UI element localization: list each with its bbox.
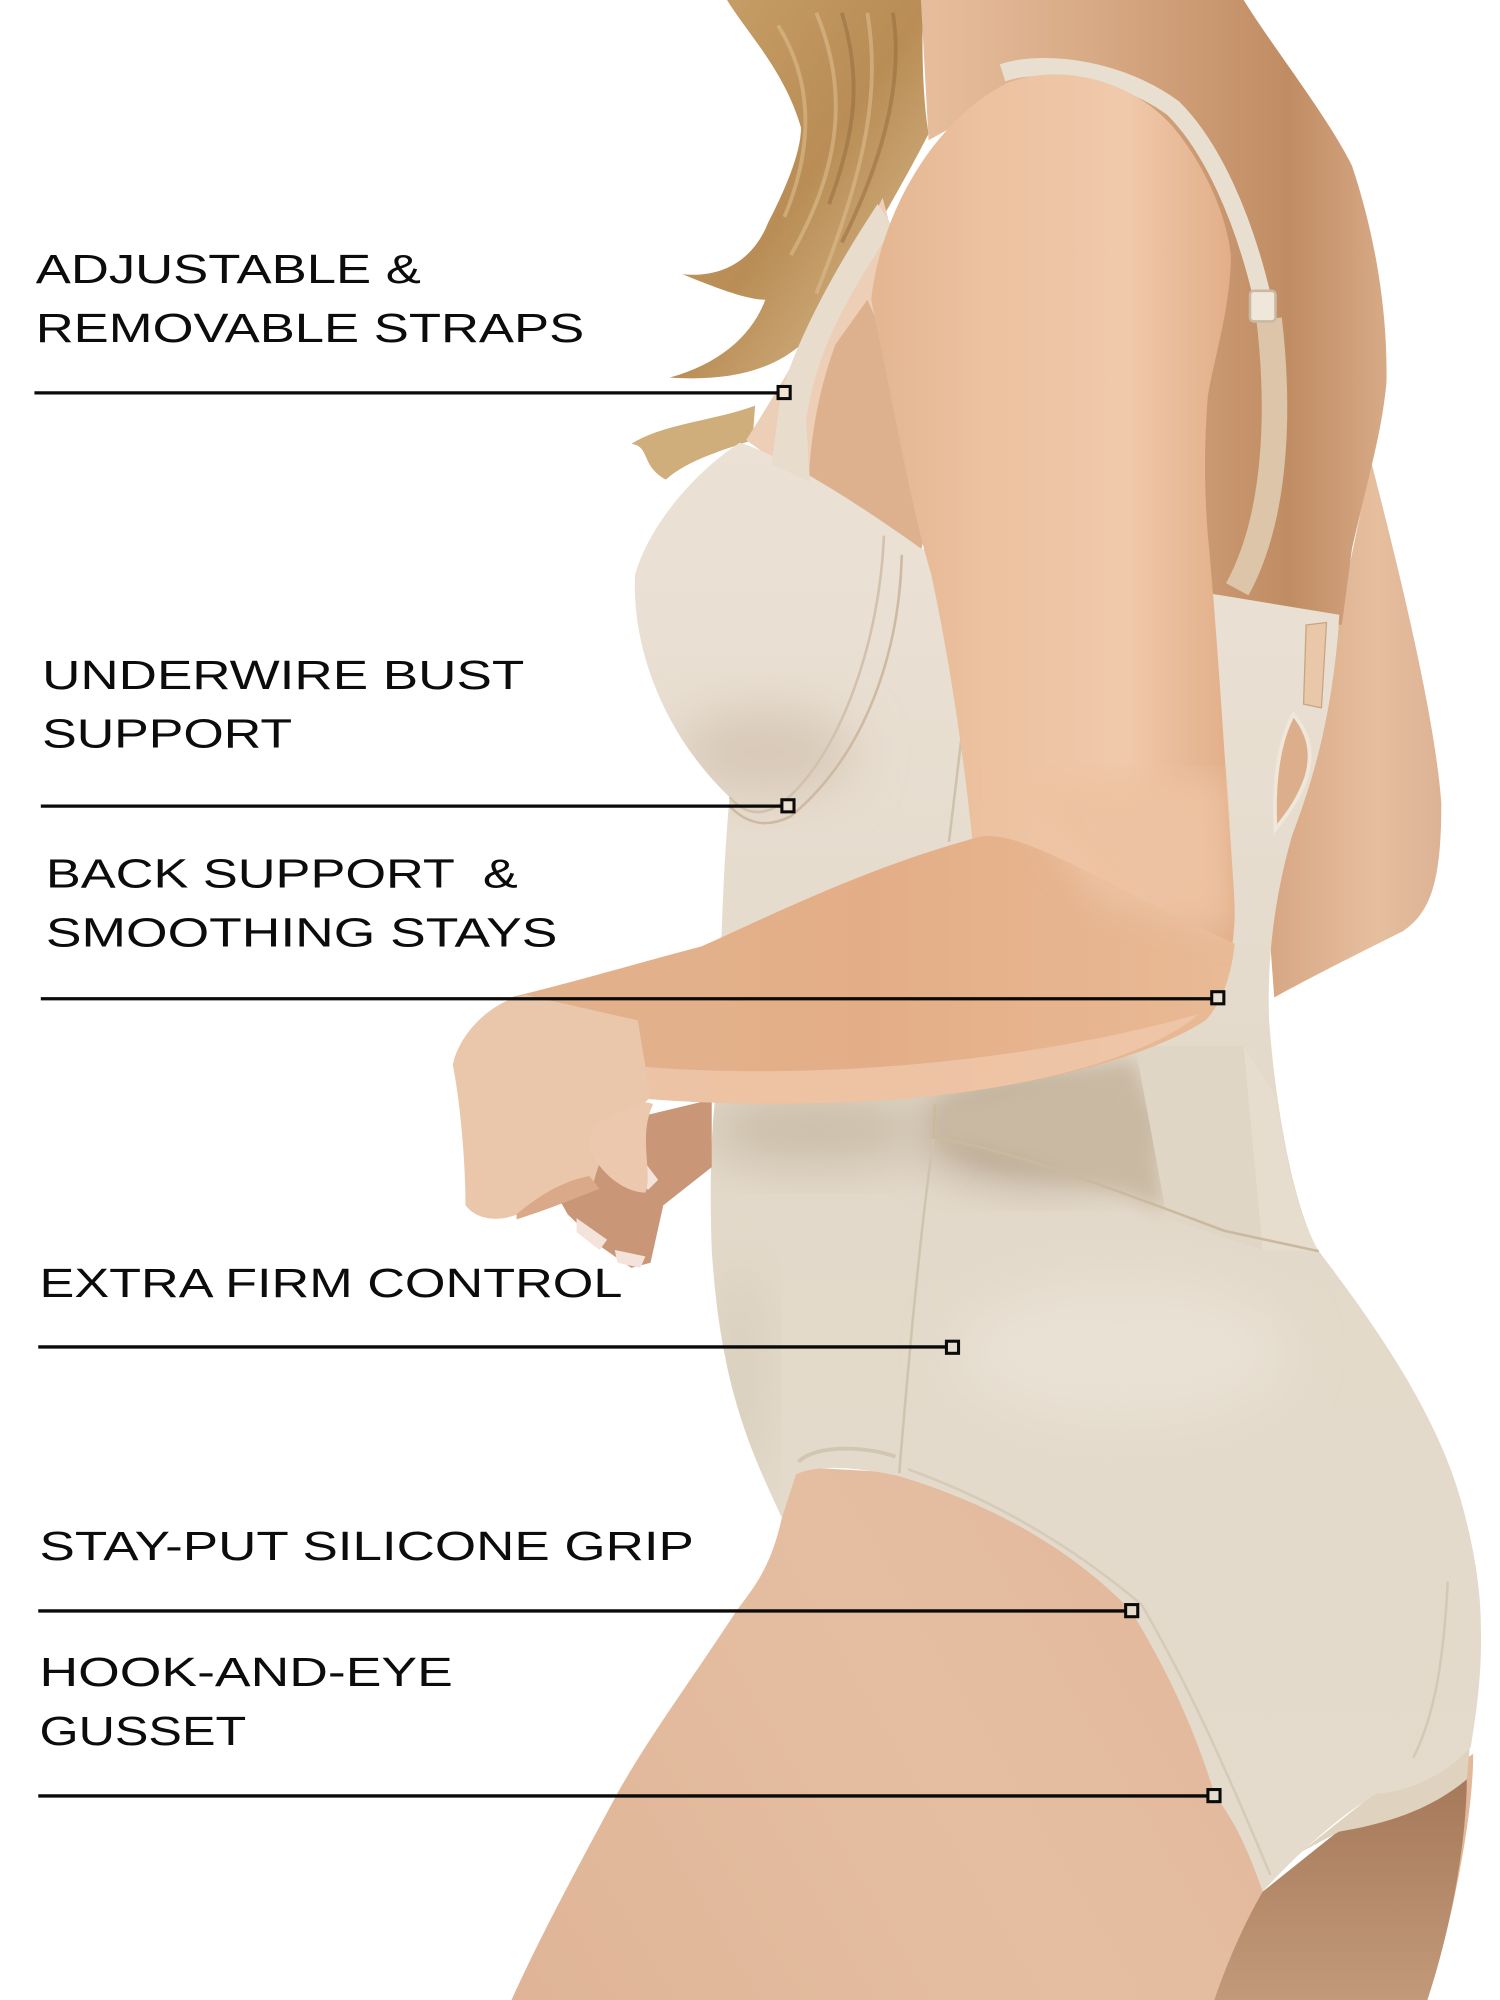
butt crease: [1413, 1582, 1448, 1758]
forearm highlight: [625, 1014, 1199, 1104]
neck and back skin: [921, 0, 1387, 625]
far arm: [1263, 462, 1441, 997]
hair: [631, 0, 929, 480]
label: back support and smoothing stays: [41, 851, 1224, 1004]
forearm: [510, 836, 1235, 1104]
main hand: [453, 995, 653, 1219]
cup seam: [730, 536, 884, 812]
gusset: [1301, 1737, 1471, 1852]
front strap: [772, 204, 893, 482]
label: stay-put silicone grip: STAY-PUT SILICONE GRIP: [40, 1523, 694, 1569]
underarm skin: [809, 300, 931, 551]
label: back support and smoothing stays: SMOOTHING STAYS: [46, 909, 557, 955]
label: underwire bust support: SUPPORT: [42, 710, 292, 756]
label: stay-put silicone grip: [38, 1523, 1138, 1617]
label: extra firm control: EXTRA FIRM CONTROL: [40, 1260, 622, 1306]
label: adjustable and removable straps: ADJUSTABLE &: [36, 246, 421, 292]
far hand fingers: [548, 1099, 712, 1268]
label: hook-and-eye gusset: GUSSET: [40, 1708, 246, 1754]
elbow blend: [1068, 774, 1234, 930]
label: hook-and-eye gusset: [38, 1649, 1220, 1802]
thigh: [511, 1467, 1473, 2000]
label: extra firm control: [38, 1260, 959, 1353]
main arm: [510, 74, 1235, 1104]
label: underwire bust support: UNDERWIRE BUST: [42, 652, 524, 698]
label: adjustable and removable straps: REMOVABLE STRAPS: [36, 305, 584, 351]
back strap: [1003, 67, 1276, 589]
finger nails: [577, 1158, 658, 1268]
label: hook-and-eye gusset: HOOK-AND-EYE: [40, 1649, 453, 1695]
label: back support and smoothing stays: BACK SUPPORT &: [46, 851, 518, 897]
chest skin: [746, 198, 931, 551]
label: underwire bust support: [41, 652, 794, 812]
label: adjustable and removable straps: [34, 246, 790, 399]
leg hem: [798, 1449, 895, 1462]
back hook closure: [1304, 622, 1327, 708]
back panel cutout: [1275, 714, 1310, 829]
side seam: [899, 1138, 934, 1473]
bodysuit: [635, 443, 1481, 1892]
